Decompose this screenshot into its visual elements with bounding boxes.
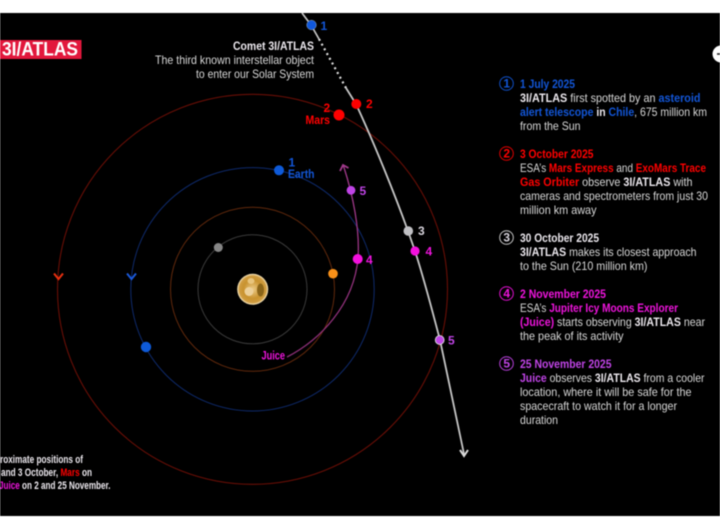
number badge 3 — [500, 231, 513, 245]
text block 4: ESA’s Jupiter Icy Moons Explorer — [520, 301, 678, 315]
label: Mars: 2 — [324, 101, 330, 115]
label: Juice: Juice — [262, 348, 285, 362]
date 5: 25 November 2025 — [520, 357, 612, 371]
label: comet 4: 4 — [426, 244, 432, 258]
planet: Venus — [328, 269, 338, 279]
icon: Sun — [237, 274, 268, 305]
text block 5: spacecraft to watch it for a longer — [520, 399, 677, 413]
label: comet 2: 2 — [366, 97, 373, 111]
date 3: 30 October 2025 — [520, 231, 599, 245]
label: Juice 4: 4 — [366, 253, 373, 267]
number badge 2: 2 — [503, 147, 510, 161]
marker: comet position 5 — [435, 336, 444, 344]
line: main path — [346, 88, 464, 454]
text block 5 — [520, 371, 705, 427]
line: incoming path — [302, 13, 319, 39]
label: comet 1: 1 — [320, 19, 328, 33]
line: unobserved dotted section — [319, 39, 346, 88]
text block 3: to the Sun (210 million km) — [520, 259, 648, 273]
label: Mars — [306, 101, 330, 127]
label: Mars: Mars — [306, 113, 330, 127]
text block 3: 3I/ATLAS makes its closest approach — [520, 245, 696, 259]
heading: comet description — [155, 39, 315, 81]
number badge 5: 5 — [503, 357, 510, 371]
number badge 1 — [500, 77, 513, 91]
date 4: 2 November 2025 — [520, 287, 606, 301]
label: Earth: Earth — [288, 167, 314, 181]
marker: comet position 2 — [351, 99, 361, 109]
text block 1 — [520, 91, 707, 133]
title badge: 3I/ATLAS — [2, 40, 78, 60]
marker: comet position 3 — [404, 226, 413, 236]
timeline item 1 — [500, 77, 707, 133]
text block 4: (Juice) starts observing 3I/ATLAS near — [520, 315, 705, 329]
curve: Juice path — [287, 166, 358, 357]
timeline item 3 — [500, 231, 696, 273]
text block 3 — [520, 245, 696, 273]
text block 2 — [520, 161, 708, 217]
number badge 4: 4 — [503, 287, 510, 301]
heading: comet description: The third known interstellar object — [155, 53, 315, 67]
label: Earth — [288, 156, 314, 181]
text block 5: Juice observes 3I/ATLAS from a cooler — [520, 371, 705, 385]
orbit: Mercury — [198, 235, 307, 344]
number badge 1: 1 — [503, 77, 510, 91]
text block 4 — [520, 301, 705, 343]
text block 5: duration — [520, 413, 558, 427]
marker: Juice position 4 — [353, 254, 363, 264]
label: Earth: 1 — [288, 156, 296, 170]
footnote: approximate positions — [0, 454, 110, 492]
icon: clipped white button — [712, 46, 720, 62]
date 2: 3 October 2025 — [520, 147, 594, 161]
orbit: Earth — [131, 168, 374, 411]
footnote: approximate positions: and 3 October, Mars on — [1, 467, 92, 479]
text block 1: 3I/ATLAS first spotted by an asteroid — [520, 91, 701, 105]
text block 2: Gas Orbiter observe 3I/ATLAS with — [520, 175, 692, 189]
footnote: approximate positions: roximate positions of — [0, 454, 83, 466]
label: comet 3: 3 — [418, 224, 425, 238]
text block 4: the peak of its activity — [520, 329, 624, 343]
timeline item 5 — [500, 357, 705, 427]
planet: Mercury — [214, 243, 223, 252]
icon: Mars orbit direction arrow — [54, 274, 63, 279]
number badge 4 — [500, 287, 513, 301]
heading: comet description: to enter our Solar System — [196, 67, 314, 81]
orbit: Mars — [58, 94, 448, 484]
number badge 2 — [500, 147, 513, 161]
planet: Mars — [334, 110, 344, 120]
heading: comet description: Comet 3I/ATLAS — [233, 39, 314, 53]
solar system diagram — [54, 94, 448, 484]
text block 2: million km away — [520, 203, 596, 217]
planet: Earth on 3 October — [141, 342, 151, 352]
icon: Juice path arrowhead — [340, 165, 348, 171]
icon: Earth orbit direction arrow — [127, 274, 136, 279]
orbit: Venus — [170, 207, 334, 371]
comet trajectory — [302, 13, 468, 456]
label: Juice 5: 5 — [360, 184, 366, 198]
Juice trajectory — [262, 165, 373, 362]
timeline item 4 — [500, 287, 705, 343]
footnote: approximate positions: Juice on 2 and 25 November. — [0, 480, 110, 492]
text block 1: from the Sun — [520, 119, 580, 133]
label: comet 5: 5 — [448, 334, 455, 348]
text block 5: location, where it will be safe for the — [520, 385, 692, 399]
planet: Earth on 1 July — [274, 165, 284, 175]
text block 1: alert telescope in Chile, 675 million km — [520, 105, 707, 119]
date 1: 1 July 2025 — [520, 77, 575, 91]
marker: Juice position 5 — [347, 186, 355, 195]
number badge 3: 3 — [503, 231, 510, 245]
timeline item 2 — [500, 147, 708, 217]
marker: comet position 4 — [410, 246, 420, 256]
number badge 5 — [500, 357, 513, 371]
text block 2: ESA’s Mars Express and ExoMars Trace — [520, 161, 706, 175]
icon: comet arrowhead — [460, 450, 468, 456]
marker: comet position 1 — [307, 20, 316, 30]
